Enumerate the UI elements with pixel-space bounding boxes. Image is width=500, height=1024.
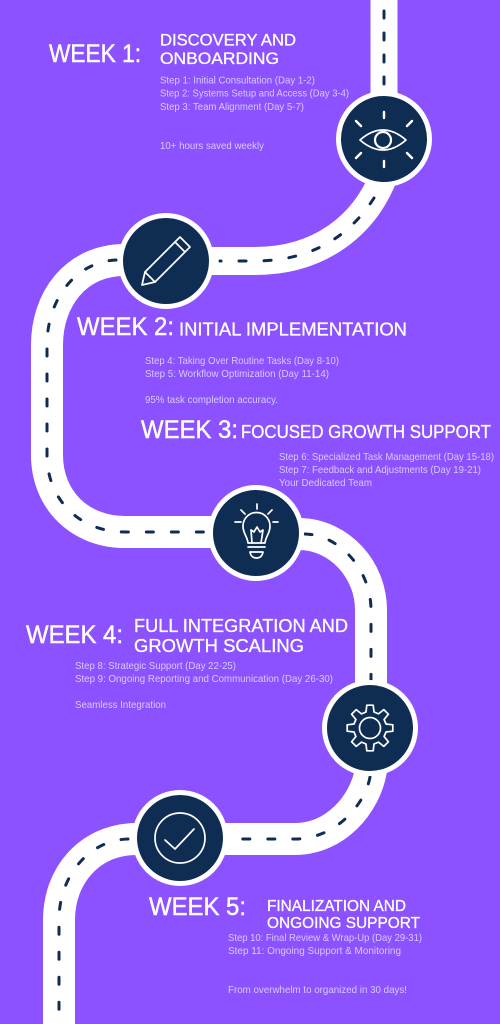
week 1 steps [160,74,349,152]
week 1 heading: DISCOVERY AND [160,30,296,50]
week 3 steps: Your Dedicated Team [279,477,372,489]
week 2 label: WEEK 2: [77,313,174,341]
panel: week 1 [49,30,349,152]
week 4 heading: GROWTH SCALING [134,636,304,656]
week 4 heading: FULL INTEGRATION AND [134,616,348,636]
week 5 steps: Step 10: Final Review & Wrap-Up (Day 29-31) [228,932,422,944]
panel: week 5 [149,893,422,996]
week 4 steps [75,660,333,711]
icon: pencil [120,216,212,306]
week 1 steps: Step 2: Systems Setup and Access (Day 3-4) [160,88,349,100]
week 4 label: WEEK 4: [26,621,123,649]
week 4 steps: Step 9: Ongoing Reporting and Communication (Day 26-30) [75,673,333,685]
week 3 steps [279,451,494,489]
week 3 heading: FOCUSED GROWTH SUPPORT [241,422,491,442]
icon: check mark [134,792,226,884]
week 3 label: WEEK 3: [141,416,238,444]
week 2 heading: INITIAL IMPLEMENTATION [179,320,407,340]
week 5 steps [228,932,422,996]
winding road [47,0,384,1024]
icon: gear [324,682,416,774]
week 5 steps: Step 11: Ongoing Support & Monitoring [228,945,401,957]
panel: week 4 [26,616,348,711]
icon: light bulb [210,488,302,578]
week 2 steps: Step 4: Taking Over Routine Tasks (Day 8-10) [145,355,339,367]
week 2 steps: 95% task completion accuracy. [145,394,278,406]
week 5 label: WEEK 5: [149,893,246,921]
week 5 steps: From overwhelm to organized in 30 days! [228,984,407,996]
week 1 steps: 10+ hours saved weekly [160,140,265,152]
week 2 steps [145,355,339,406]
panel: week 2 [77,313,407,406]
week 4 steps: Seamless Integration [75,699,166,711]
week 1 steps: Step 3: Team Alignment (Day 5-7) [160,101,304,113]
week 2 steps: Step 5: Workflow Optimization (Day 11-14) [145,368,329,380]
week 5 heading: FINALIZATION AND [267,898,406,915]
week 4 steps: Step 8: Strategic Support (Day 22-25) [75,660,236,672]
week 1 steps: Step 1: Initial Consultation (Day 1-2) [160,74,315,86]
week 1 heading: ONBOARDING [160,49,279,68]
icon: eye [338,94,430,184]
week 3 steps: Step 7: Feedback and Adjustments (Day 19-21) [279,464,481,476]
week 1 label: WEEK 1: [49,40,141,68]
week 5 heading: ONGOING SUPPORT [267,915,420,932]
panel: week 3 [141,416,494,489]
